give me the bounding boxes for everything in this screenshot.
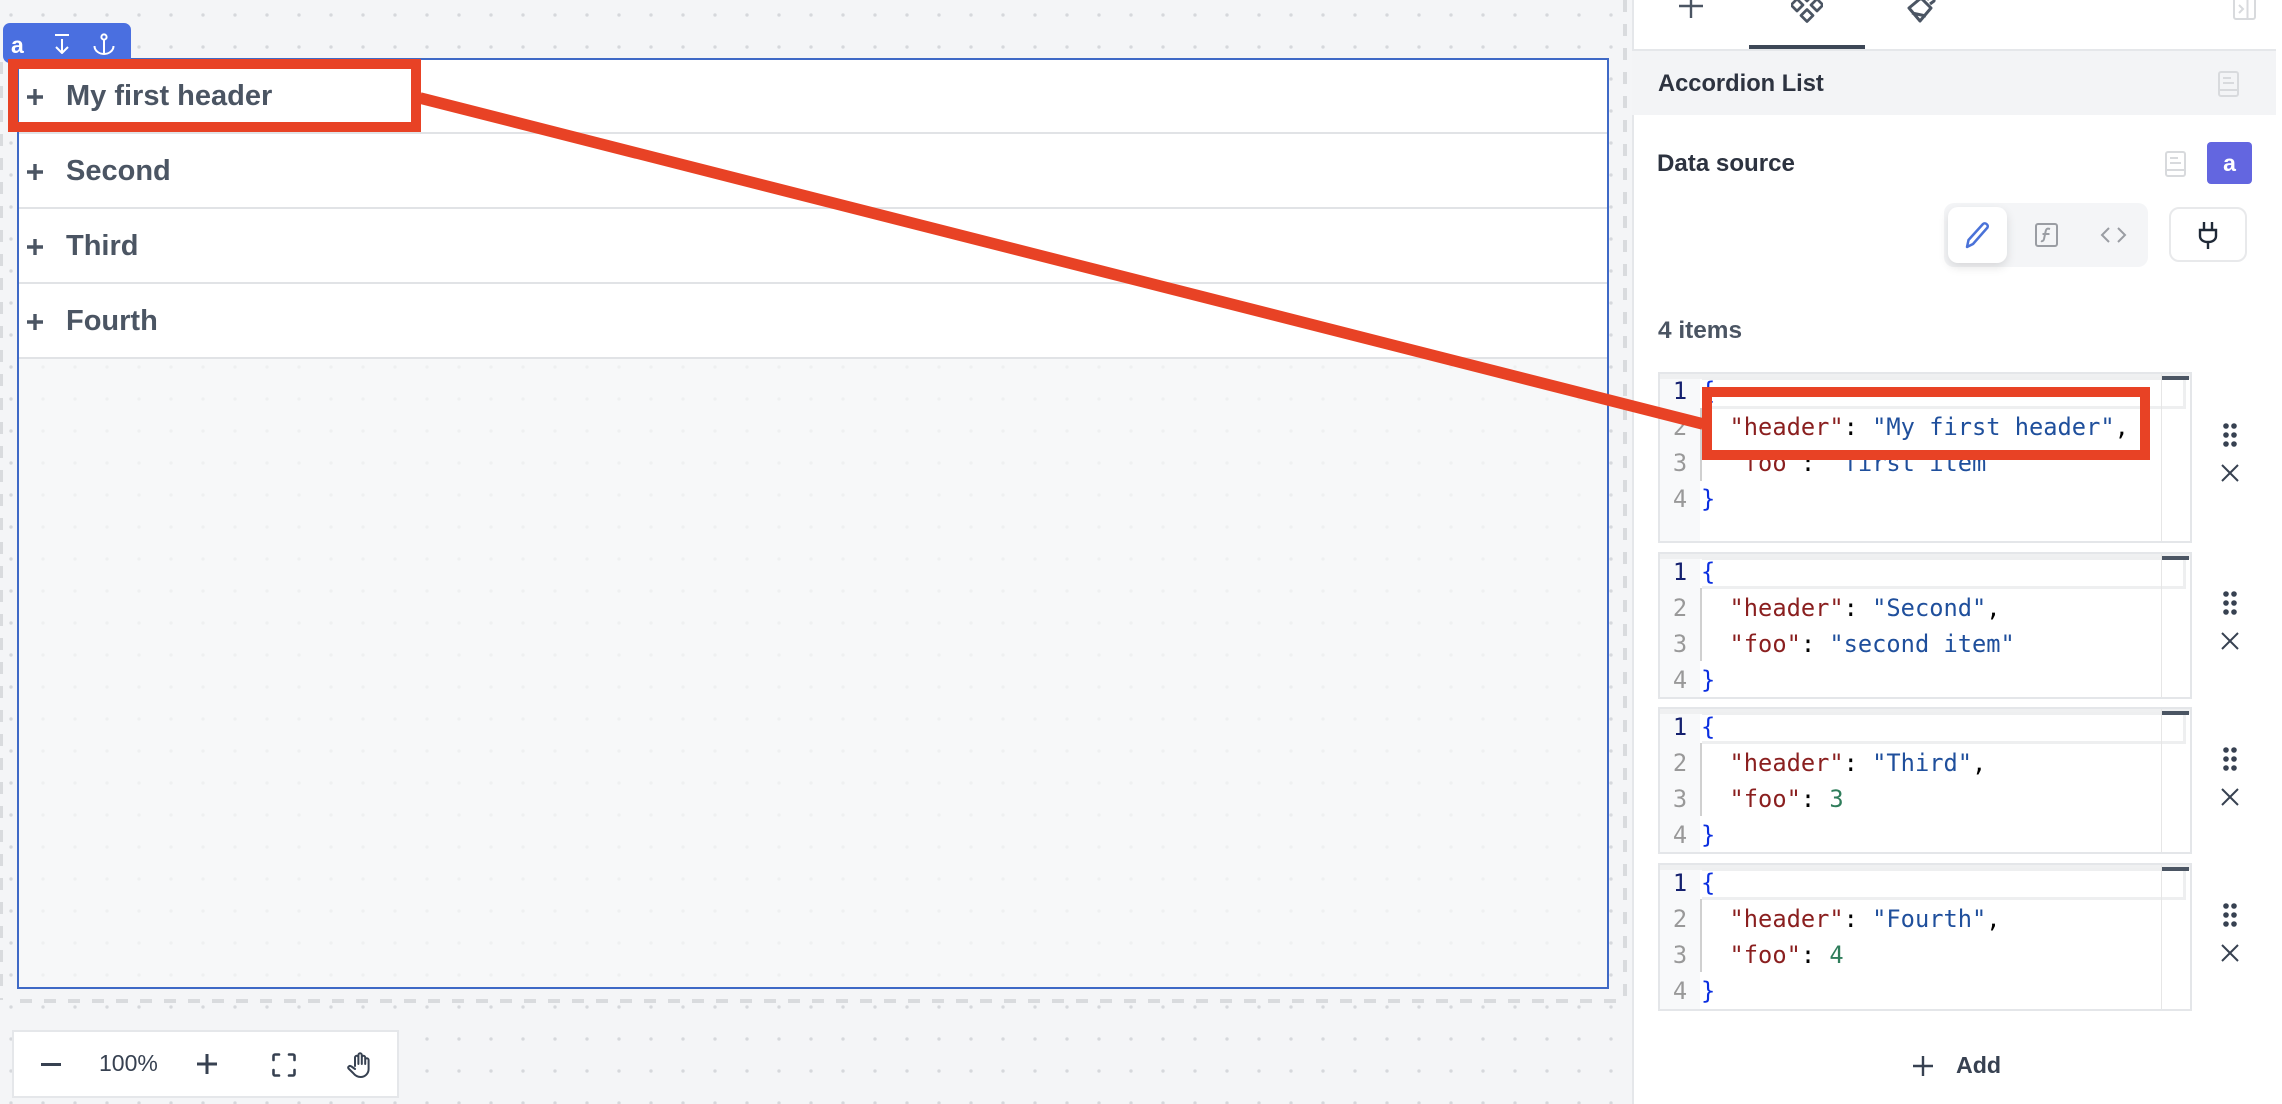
tab icon: components: [1791, 0, 1823, 23]
segmented control: [1944, 203, 2148, 267]
zoom toolbar: [12, 1030, 399, 1098]
editor: item 1: }: [1701, 485, 1715, 513]
item 1 controls: [2222, 423, 2238, 481]
editor: item 1: {: [1701, 377, 1715, 405]
icon: anchor: [94, 33, 114, 55]
editor: item 1: 3: [1673, 449, 1687, 477]
icon: docs: [2218, 71, 2239, 97]
editor: item 4: "foo": 4: [1730, 941, 1844, 969]
editor: item 4: {: [1701, 869, 1715, 897]
item 3 controls: [2222, 747, 2238, 805]
icon: code: [2100, 227, 2126, 243]
editor: item 2: }: [1701, 666, 1715, 694]
label: 4 items: 4 items: [1658, 317, 1742, 344]
data source badge: [2207, 142, 2252, 184]
editor: item 2: [1658, 552, 2192, 699]
header band: Accordion List: [1632, 49, 2276, 115]
editor: item 3: [1658, 707, 2192, 854]
editor: item 4: }: [1701, 977, 1715, 1005]
editor: item 3: {: [1701, 713, 1715, 741]
editor: item 4: 2: [1673, 905, 1687, 933]
accordion row: My first header: My first header: [66, 80, 272, 112]
editor: item 2: "foo": "second item": [1730, 630, 2015, 658]
editor: item 2: 2: [1673, 594, 1687, 622]
editor: item 4: 3: [1673, 941, 1687, 969]
editor: item 3: 2: [1673, 749, 1687, 777]
accordion row: My first header: [19, 60, 1607, 134]
editor: item 3: 1: [1673, 713, 1687, 741]
highlight box: JSON header line: [1707, 392, 2145, 455]
editor: item 3: "header": "Third",: [1730, 749, 1986, 777]
editor: item 1: [1658, 372, 2192, 543]
editor: item 1: 2: [1673, 413, 1687, 441]
editor: item 2: 4: [1673, 666, 1687, 694]
editor: item 1: 1: [1673, 377, 1687, 405]
item 4 controls: [2222, 903, 2238, 961]
icon: zoom out: [41, 1063, 61, 1066]
icon: hand: [347, 1052, 370, 1078]
editor: item 3: 4: [1673, 821, 1687, 849]
editor: item 4: 4: [1673, 977, 1687, 1005]
icon: formula: [2035, 223, 2058, 247]
accordion row: Fourth: [19, 284, 1607, 359]
accordion list component: [17, 58, 1609, 989]
highlight box: accordion header: [13, 64, 416, 127]
component letter: a: [11, 32, 24, 58]
label: Data source: Data source: [1657, 150, 1795, 177]
editor: item 3: 3: [1673, 785, 1687, 813]
active segment: pencil: [1948, 207, 2007, 263]
editor: item 2: 3: [1673, 630, 1687, 658]
editor: item 4: "header": "Fourth",: [1730, 905, 2001, 933]
icon: zoom in: [197, 1054, 217, 1074]
tab icon: styles: [1907, 0, 1936, 23]
icon: add: [1913, 1056, 1933, 1076]
zoom level: 100%: [99, 1050, 158, 1076]
canvas bottom dashed border: [20, 999, 1624, 1003]
right edge strip: [2276, 0, 2282, 1104]
data source badge: a: [2223, 150, 2236, 176]
editor: item 4: 1: [1673, 869, 1687, 897]
editor: item 4: [1658, 863, 2192, 1011]
plug button: [2169, 207, 2247, 262]
canvas right dashed border: [1623, 0, 1627, 1004]
accordion row: Second: Second: [66, 155, 171, 187]
accordion row: Second: [19, 134, 1607, 209]
editor: item 1: "foo": "first item": [1730, 449, 2001, 477]
accordion row: Third: [19, 209, 1607, 284]
icon: fit to screen: [272, 1053, 296, 1077]
icon: plug: [2198, 222, 2218, 249]
editor: item 1: 4: [1673, 485, 1687, 513]
editor: item 2: 1: [1673, 558, 1687, 586]
icon: move down: [55, 34, 69, 54]
item 2 controls: [2222, 591, 2238, 649]
active tab underline: [1749, 45, 1865, 49]
icon: pencil: [1966, 222, 1989, 248]
accordion row: Fourth: Fourth: [66, 305, 158, 337]
selected component tab: [3, 23, 131, 63]
tab icon: collapse panel: [2233, 0, 2256, 20]
accordion row: Third: Third: [66, 230, 138, 262]
panel title: Accordion List: [1658, 71, 1824, 97]
item controls: drag handles and remove buttons: [2221, 423, 2239, 962]
panel: properties sidebar: [1632, 0, 2276, 1104]
editor: item 3: "foo": 3: [1730, 785, 1844, 813]
icon: docs: [2165, 151, 2186, 177]
button label: Add: Add: [1956, 1052, 2001, 1078]
arrow: connector line: [420, 98, 1703, 424]
tab icon: add: [1679, 0, 1703, 18]
editor: item 1: "header": "My first header",: [1730, 413, 2129, 441]
canvas left dashed border: [0, 62, 3, 1000]
editor: item 3: }: [1701, 821, 1715, 849]
editor: item 2: "header": "Second",: [1730, 594, 2001, 622]
editor: item 2: {: [1701, 558, 1715, 586]
